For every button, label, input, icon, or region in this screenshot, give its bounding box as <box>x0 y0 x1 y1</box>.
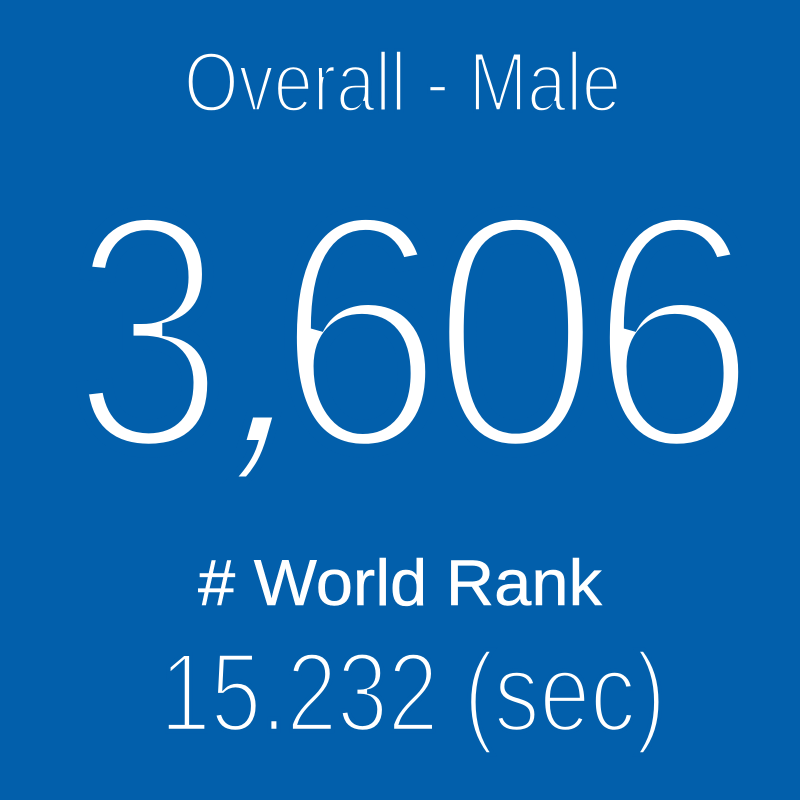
time value in seconds: 15.232 (sec) <box>160 630 666 755</box>
big number: rank value: 3 <box>72 145 225 520</box>
big number: rank value: 606 <box>275 144 758 520</box>
title: Overall - Male <box>184 35 621 129</box>
label: world rank: # World Rank <box>198 546 603 619</box>
big number: rank value: , <box>198 186 368 505</box>
